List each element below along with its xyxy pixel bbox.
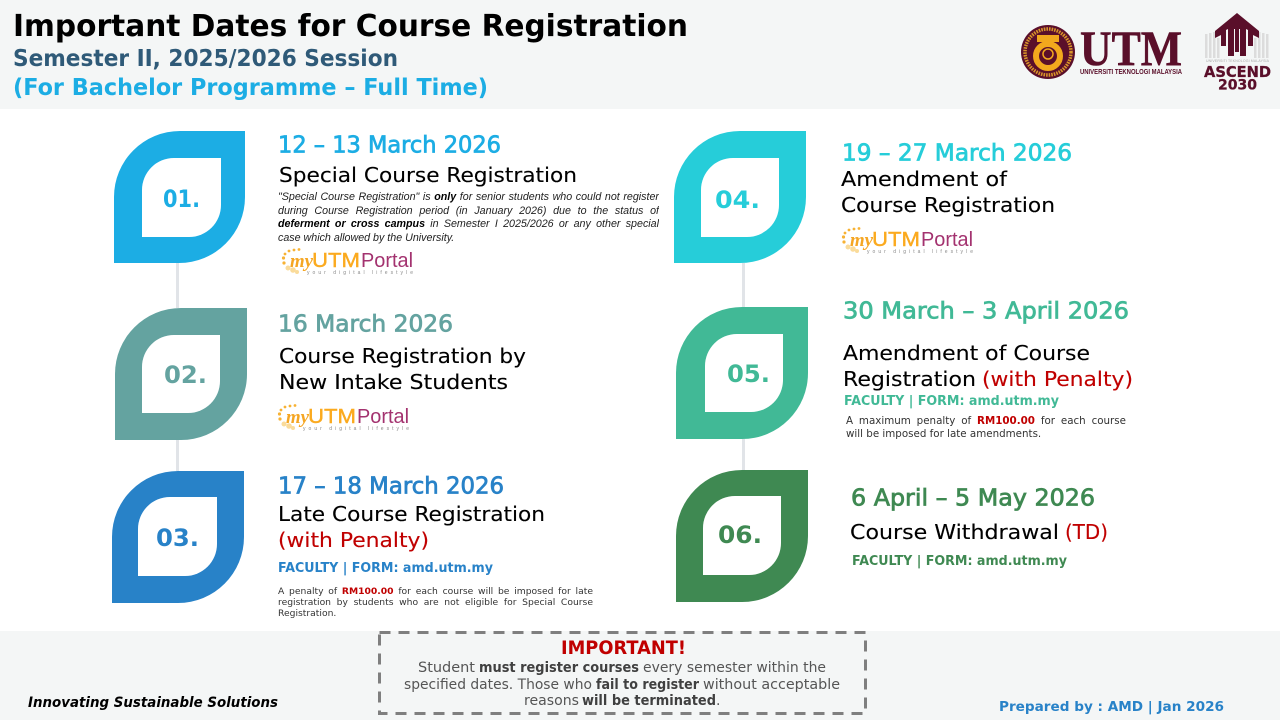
step 05: (with Penalty)	[982, 367, 1133, 391]
callout: important: reasons	[524, 693, 579, 709]
step 04: Course Registration	[841, 193, 1055, 217]
icon: badge 02	[115, 308, 247, 440]
note 03: registration by students who are not eligible for Special Course	[278, 597, 593, 608]
callout: important: will be terminated	[582, 693, 716, 709]
step 06	[676, 470, 1108, 602]
logo: myUTM Portal: UTM	[872, 229, 920, 251]
icon: badge 03	[112, 471, 244, 603]
note 03: A penalty of RM100.00 for each course will be imposed for late	[278, 586, 593, 597]
logo: myUTM Portal: Portal	[357, 406, 409, 428]
connector lines: right column	[742, 263, 745, 470]
icon: badge 01: 01.	[163, 185, 200, 213]
prepared by: Prepared by : AMD | Jan 2026	[999, 699, 1224, 715]
note 01	[278, 191, 659, 247]
icon: badge 04: 04.	[715, 186, 760, 214]
date 03: 17 – 18 March 2026	[278, 474, 504, 500]
note 01: case which allowed by the University.	[278, 232, 454, 244]
footer band	[0, 631, 1280, 720]
heading 03: Late Course Registration	[278, 502, 545, 526]
faculty form 05: FACULTY | FORM: amd.utm.my	[844, 394, 1060, 409]
date 06: 6 April – 5 May 2026	[851, 486, 1095, 512]
logo: myUTM Portal: UTM	[308, 406, 356, 428]
logo: Ascend 2030: ASCEND	[1204, 63, 1271, 81]
callout: important	[380, 632, 866, 714]
step 02	[115, 308, 526, 440]
logo: myUTM Portal: my	[290, 251, 314, 272]
note 01: "Special Course Registration" is only for senior students who could not register	[278, 191, 659, 203]
icon: badge 05: 05.	[727, 360, 770, 388]
callout: important: without acceptable	[703, 677, 840, 693]
note 05: will be imposed for late amendments.	[846, 428, 1041, 440]
connector lines: left column	[176, 263, 179, 471]
logo: myUTM Portal	[278, 404, 409, 432]
date 02: 16 March 2026	[278, 312, 453, 338]
icon: badge 04	[674, 131, 806, 263]
faculty form 03: FACULTY | FORM: amd.utm.my	[278, 561, 494, 576]
title: Important Dates for Course Registration	[13, 9, 688, 44]
callout: important: Student	[418, 660, 476, 676]
callout: important: fail to register	[596, 677, 699, 693]
step 05: Registration	[843, 367, 976, 391]
date 04: 19 – 27 March 2026	[842, 140, 1072, 166]
icon: badge 03: 03.	[156, 524, 199, 552]
note 05	[846, 415, 1126, 443]
date 01: 12 – 13 March 2026	[278, 132, 501, 158]
icon: badge 01	[114, 131, 245, 263]
logo: myUTM Portal: my	[850, 230, 874, 251]
note 05: A maximum penalty of RM100.00 for each course	[846, 415, 1126, 427]
note 01: deferment or cross campus in Semester I 2025/2026 or any other special	[278, 218, 659, 230]
icon: badge 06: 06.	[718, 521, 762, 549]
heading 04: Amendment of	[841, 167, 1008, 191]
heading 01: Special Course Registration	[279, 163, 577, 187]
tagline: Innovating Sustainable Solutions	[28, 695, 278, 711]
logo: Ascend 2030: UNIVERSITI TEKNOLOGI MALAYSIA	[1206, 59, 1270, 63]
logo: myUTM Portal: UTM	[312, 250, 360, 272]
logo: myUTM Portal: your digital lifestyle	[303, 426, 409, 432]
logo: UTM: UTM	[1080, 20, 1182, 76]
step 01	[114, 131, 659, 276]
step 02: New Intake Students	[279, 370, 508, 394]
step 06: (TD)	[1065, 520, 1108, 544]
heading 02: Course Registration by	[279, 344, 526, 368]
logo: Ascend 2030: 2030	[1218, 78, 1257, 94]
step 05	[676, 298, 1133, 443]
callout: important: must register courses	[479, 660, 639, 676]
note 01: during Course Registration period (in January 2026) due to the status of	[278, 204, 659, 216]
logo: Ascend 2030	[1204, 13, 1271, 94]
icon: badge 05	[676, 307, 808, 439]
logo: myUTM Portal: your digital lifestyle	[307, 270, 413, 276]
logo: myUTM Portal	[842, 227, 973, 255]
callout: important: every semester within the	[643, 660, 826, 676]
icon: badge 02: 02.	[164, 361, 207, 389]
faculty form 06: FACULTY | FORM: amd.utm.my	[852, 554, 1068, 569]
date 05: 30 March – 3 April 2026	[843, 298, 1129, 324]
step 03	[112, 471, 593, 622]
logo: UTM	[1021, 20, 1182, 79]
logo: myUTM Portal: your digital lifestyle	[867, 249, 973, 255]
callout: important: specified dates. Those who	[404, 677, 592, 693]
callout: important: IMPORTANT!	[561, 637, 686, 659]
logo: myUTM Portal: Portal	[921, 229, 973, 251]
step 04	[674, 131, 1072, 263]
heading 06: Course Withdrawal	[850, 520, 1059, 544]
note 03	[278, 586, 593, 622]
logo: myUTM Portal: my	[286, 407, 310, 428]
logo: myUTM Portal: Portal	[361, 250, 413, 272]
subtitle: programme: (For Bachelor Programme – Full Time)	[13, 75, 488, 101]
callout: important: .	[716, 693, 720, 709]
logo: UTM: UNIVERSITI TEKNOLOGI MALAYSIA	[1080, 67, 1182, 76]
header band	[0, 0, 1280, 109]
step 03: (with Penalty)	[278, 528, 429, 552]
subtitle: semester: Semester II, 2025/2026 Session	[13, 46, 398, 72]
logo: myUTM Portal	[282, 248, 413, 276]
note 03: Registration.	[278, 608, 336, 619]
heading 05: Amendment of Course	[843, 341, 1090, 365]
icon: badge 06	[676, 470, 808, 602]
